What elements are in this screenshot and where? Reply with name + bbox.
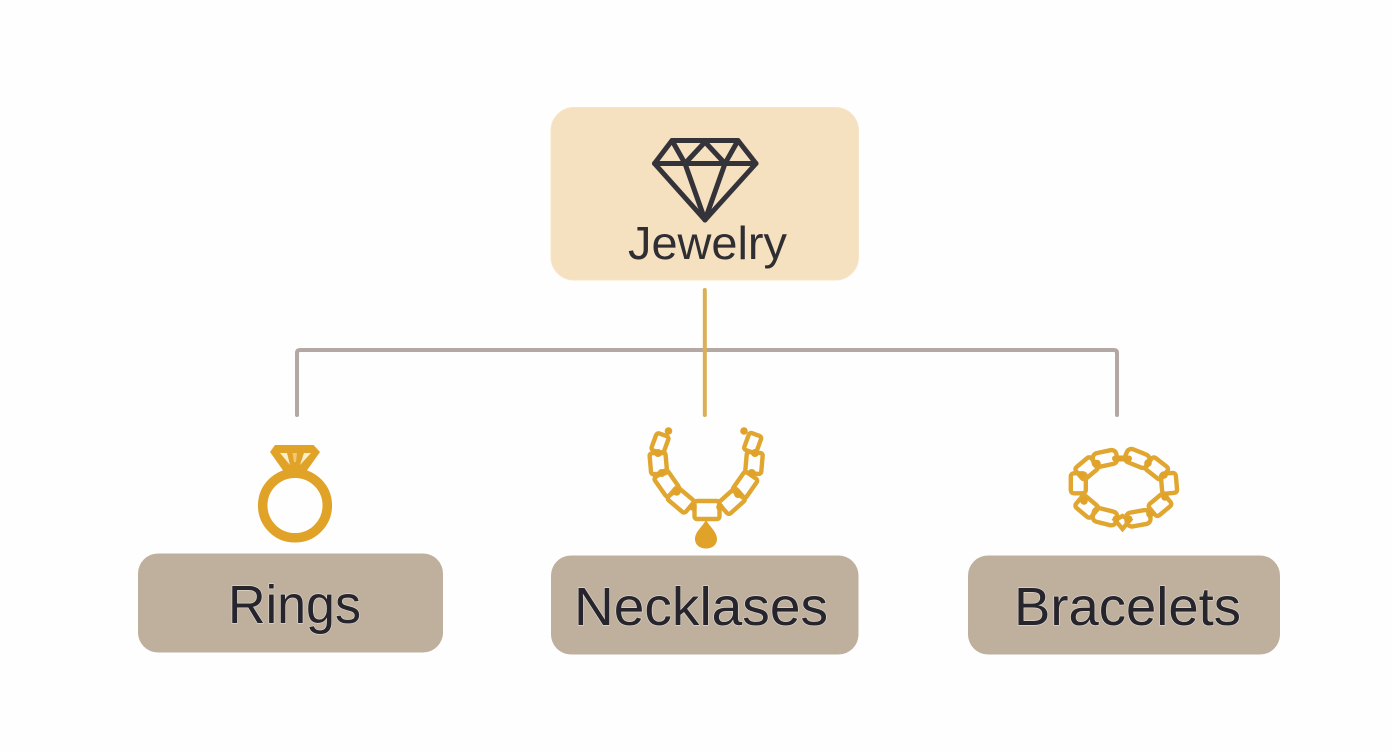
label: Rings: Rings	[228, 575, 361, 635]
icon: ring	[263, 445, 327, 538]
icon: diamond	[654, 140, 756, 220]
root panel: Jewelry	[551, 108, 858, 280]
label: Bracelets: Bracelets	[1014, 577, 1241, 637]
connector: gold trunk to necklaces	[703, 290, 707, 415]
panel: Rings	[138, 554, 443, 652]
root label: Jewelry: Jewelry	[628, 217, 787, 269]
connector: grey branch to rings and bracelets	[297, 350, 1117, 415]
icon: bracelet	[1071, 447, 1177, 529]
icon: necklace	[649, 427, 763, 548]
panel: Bracelets	[968, 556, 1280, 654]
label: Necklases: Necklases	[574, 577, 828, 637]
panel: Necklases	[551, 556, 858, 654]
